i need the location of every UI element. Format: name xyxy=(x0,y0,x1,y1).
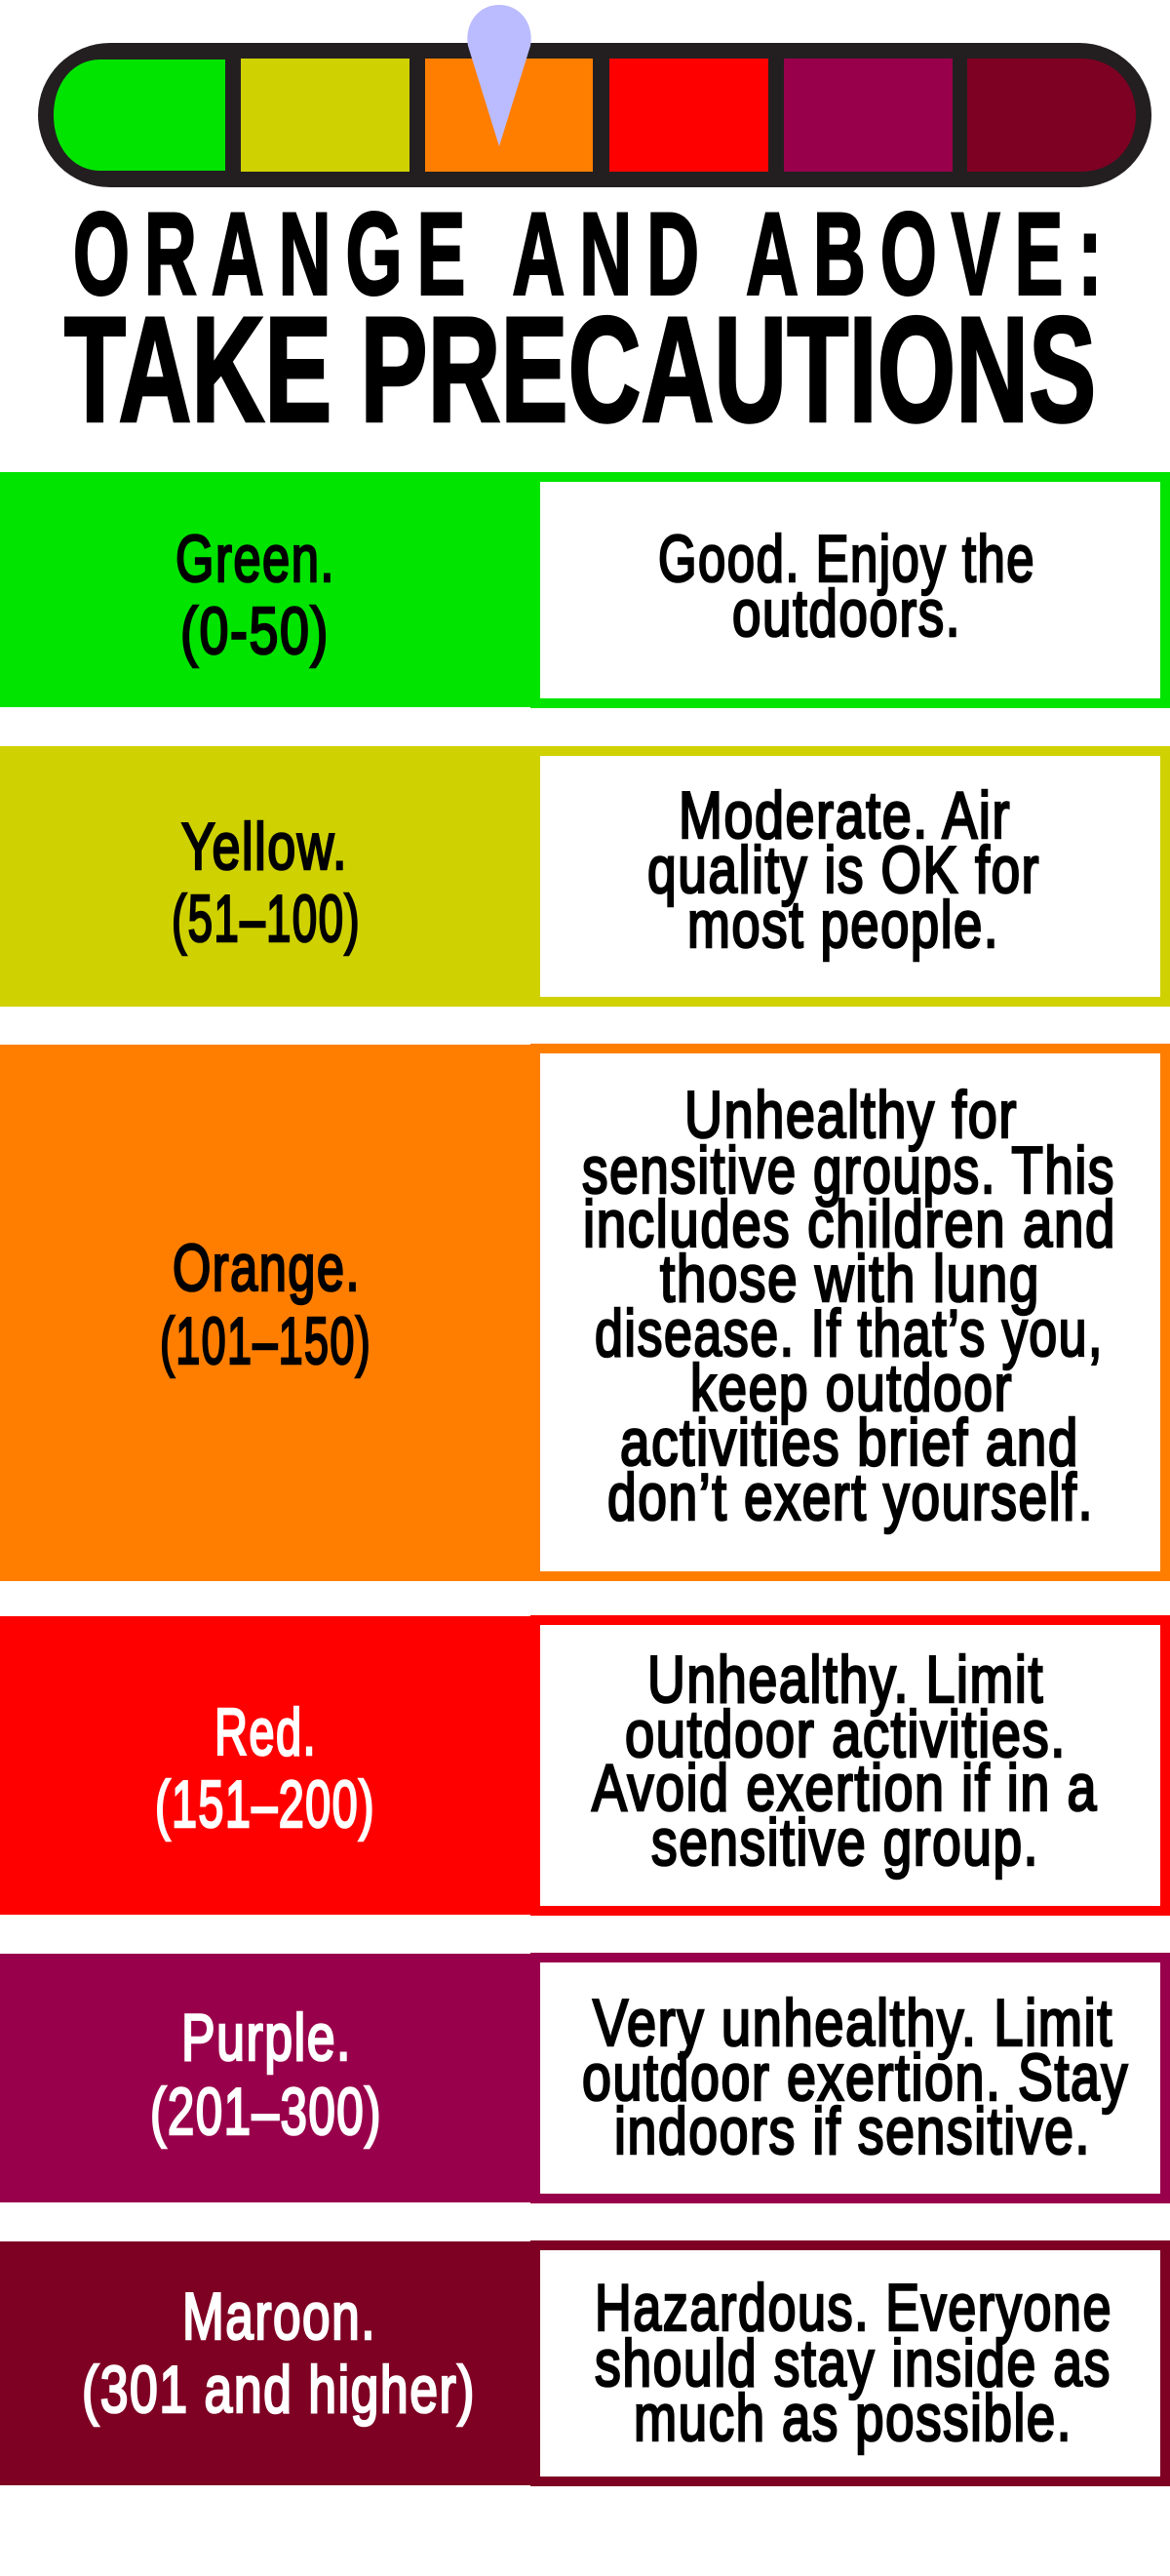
gauge segment: maroon xyxy=(967,59,1136,172)
title line: take precautions: TAKE PRECAUTIONS xyxy=(64,286,1096,453)
description: unhealthy: outdoor activities. xyxy=(625,1697,1067,1771)
AQI gauge bar xyxy=(38,5,1151,187)
description: unhealthy for sensitive groups: Unhealthy for xyxy=(684,1078,1018,1152)
gauge segment: orange xyxy=(425,59,593,172)
description: moderate: most people. xyxy=(687,888,999,962)
gauge segment: yellow xyxy=(241,59,410,172)
description frame: orange xyxy=(535,1049,1165,1576)
label: green range xyxy=(176,522,335,668)
description frame: maroon xyxy=(535,2245,1165,2481)
description: moderate xyxy=(647,778,1040,962)
colour block: orange xyxy=(0,1045,540,1581)
label: red range: (151–200) xyxy=(155,1767,375,1842)
panel: yellow row xyxy=(0,746,1165,1007)
description frame: red xyxy=(535,1620,1165,1911)
colour block: purple xyxy=(0,1954,540,2202)
label: red range xyxy=(155,1695,375,1842)
label: maroon range: (301 and higher) xyxy=(82,2353,476,2427)
description: unhealthy for sensitive groups xyxy=(582,1078,1116,1534)
label: green range: Green. xyxy=(176,522,335,596)
label: orange range: Orange. xyxy=(173,1231,361,1305)
description: moderate: quality is OK for xyxy=(647,833,1040,907)
description: very unhealthy xyxy=(582,1986,1129,2168)
label: purple range xyxy=(150,2001,382,2149)
description: unhealthy for sensitive groups: keep outdoor xyxy=(690,1351,1013,1425)
description: unhealthy: sensitive group. xyxy=(651,1805,1039,1880)
panel: red row xyxy=(0,1616,1165,1915)
colour block: maroon xyxy=(0,2241,540,2485)
label: red range: Red. xyxy=(214,1695,317,1769)
description: unhealthy for sensitive groups: those with lung xyxy=(660,1242,1040,1316)
description frame: purple xyxy=(535,1958,1165,2199)
colour block: yellow xyxy=(0,746,540,1007)
gauge frame xyxy=(38,43,1151,187)
description: good: outdoors. xyxy=(732,576,961,651)
title line: orange and above: ORANGE AND ABOVE: xyxy=(73,190,1102,320)
description: hazardous xyxy=(595,2271,1112,2455)
title xyxy=(64,190,1102,453)
description frame: green xyxy=(535,477,1165,703)
panel: purple row xyxy=(0,1954,1165,2202)
label: orange range xyxy=(160,1231,371,1378)
description frame: yellow xyxy=(535,751,1165,1002)
label: maroon range xyxy=(82,2279,476,2427)
colour block: green xyxy=(0,472,540,707)
description: unhealthy: Unhealthy. Limit xyxy=(647,1643,1044,1717)
label: purple range: Purple. xyxy=(181,2001,352,2075)
description: moderate: Moderate. Air xyxy=(679,778,1011,852)
label: green range: (0-50) xyxy=(180,594,330,668)
label: yellow range: Yellow. xyxy=(181,810,348,884)
label: maroon range: Maroon. xyxy=(182,2279,376,2354)
panel: green row xyxy=(0,472,1165,707)
colour block: red xyxy=(0,1616,540,1915)
gauge segment: red xyxy=(609,59,768,172)
label: orange range: (101–150) xyxy=(160,1304,371,1378)
panel: maroon row xyxy=(0,2241,1165,2485)
description: good: Good. Enjoy the xyxy=(658,522,1035,596)
description: good xyxy=(658,522,1035,651)
description: unhealthy xyxy=(592,1643,1098,1880)
label: yellow range: (51–100) xyxy=(172,882,361,956)
gauge segment: green xyxy=(54,59,225,171)
label: purple range: (201–300) xyxy=(150,2075,382,2149)
icon: pointer pin xyxy=(467,5,531,146)
label: yellow range xyxy=(172,810,361,956)
gauge segment: purple xyxy=(784,59,953,172)
panel: orange row xyxy=(0,1045,1165,1581)
